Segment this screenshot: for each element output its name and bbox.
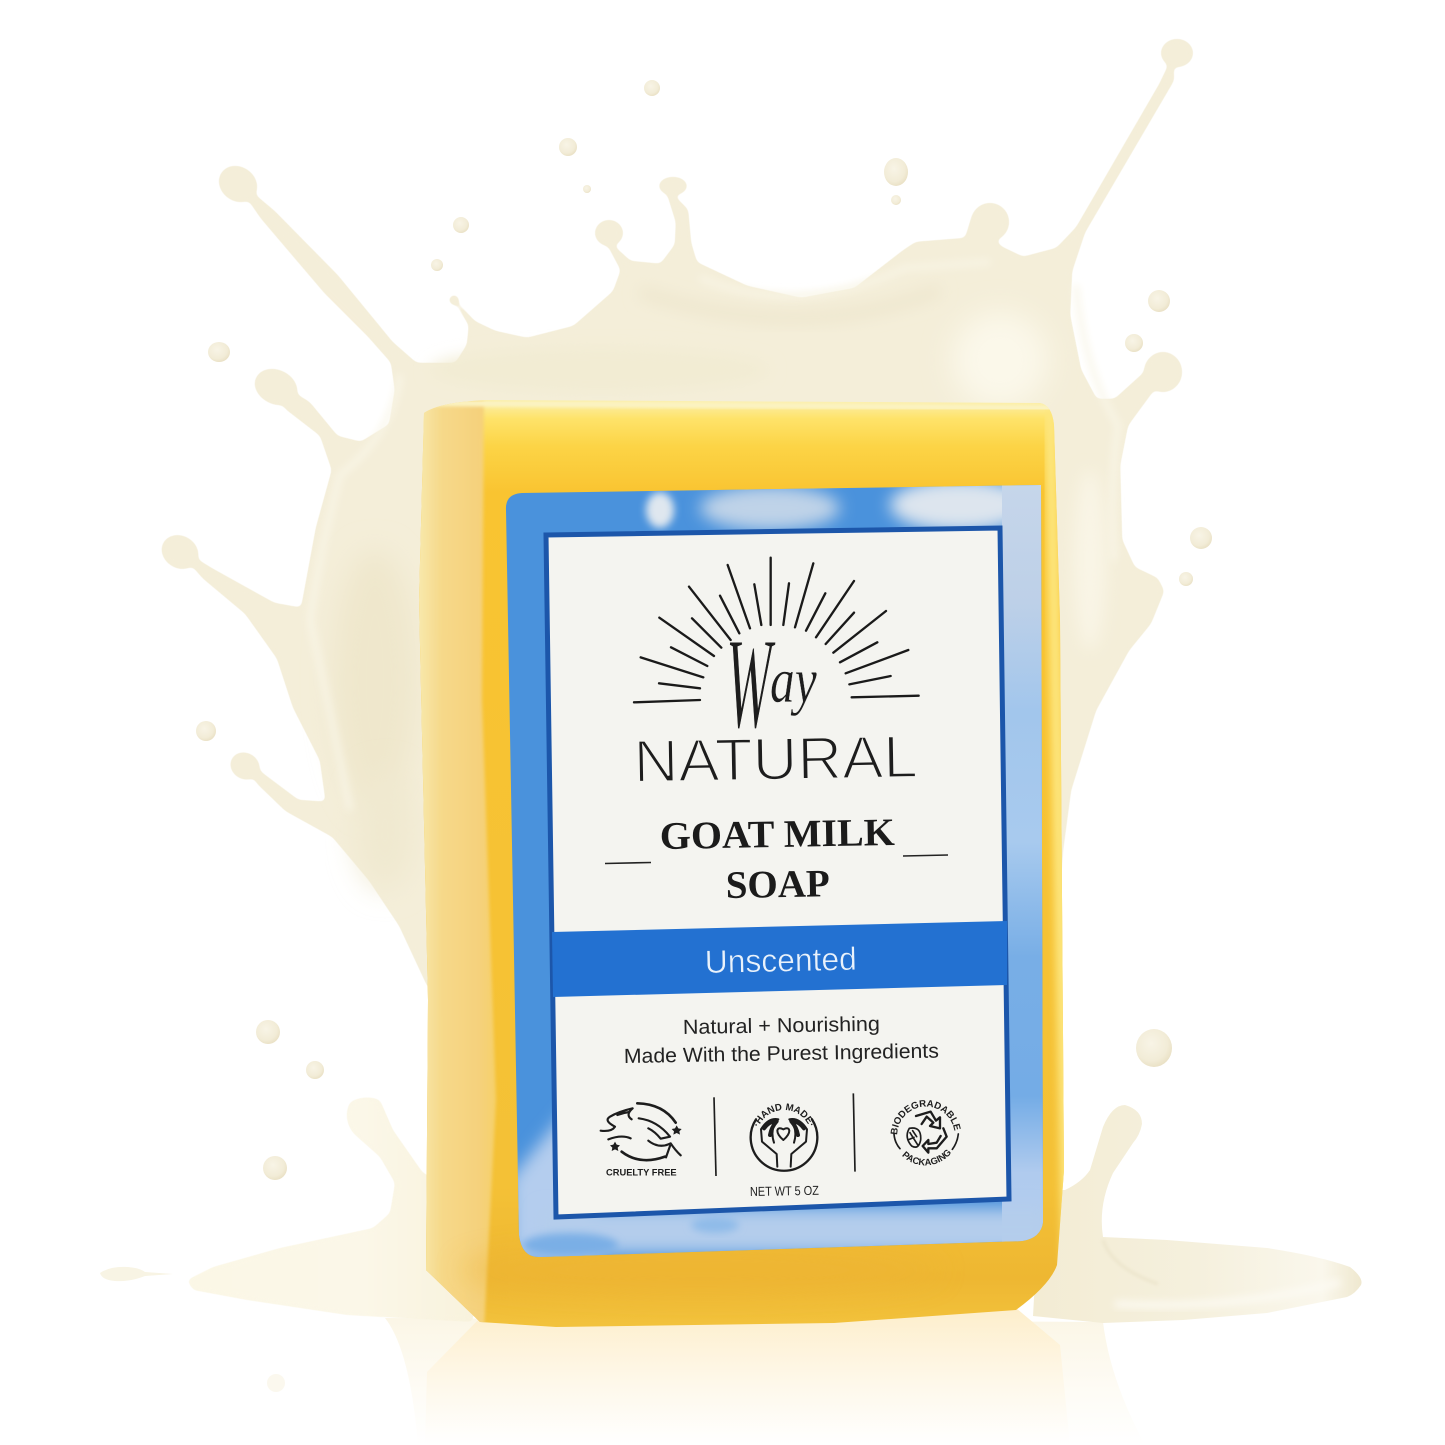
product label [506,485,1043,1257]
milk pool and left splash [187,1097,480,1322]
net weight: NET WT 5 OZ [750,1183,819,1199]
divider left [714,1097,716,1176]
label white panel [546,528,1009,1217]
milk splash crown [157,40,1192,1000]
reflection under soap and pool [267,1308,1145,1445]
logo script word: ay [770,646,817,717]
milk droplets [100,80,1212,1281]
icon: cruelty free rabbit: CRUELTY FREE [606,1168,677,1178]
crown interior shading [310,262,1118,890]
tagline [624,1013,939,1068]
divider right [853,1093,855,1172]
icon: cruelty free rabbit [601,1103,682,1178]
icon: biodegradable packaging: BIODEGRADABLE [890,1100,961,1134]
tagline: Made With the Purest Ingredients [624,1040,939,1068]
scent band [552,921,1007,997]
scent name: Unscented [704,941,857,980]
product title: SOAP [725,862,830,907]
icon: biodegradable packaging [890,1100,961,1166]
tagline: Natural + Nourishing [683,1013,880,1039]
logo brand name: NATURAL [633,723,918,795]
product title: GOAT MILK [659,811,896,858]
icon: hand made [749,1103,818,1172]
milk pool and right splash [1033,1105,1362,1323]
soap bar [415,400,1068,1330]
logo script word [726,611,817,756]
logo sunburst [634,558,919,702]
icon: hand made: ·HAND MADE· [755,1103,813,1126]
logo script word: W [726,611,776,756]
soap side face [415,400,1068,1330]
icon: biodegradable packaging: PACKAGING [902,1150,951,1166]
product title [605,811,948,907]
sky clouds [510,470,1052,1260]
certification icons [600,1093,961,1178]
